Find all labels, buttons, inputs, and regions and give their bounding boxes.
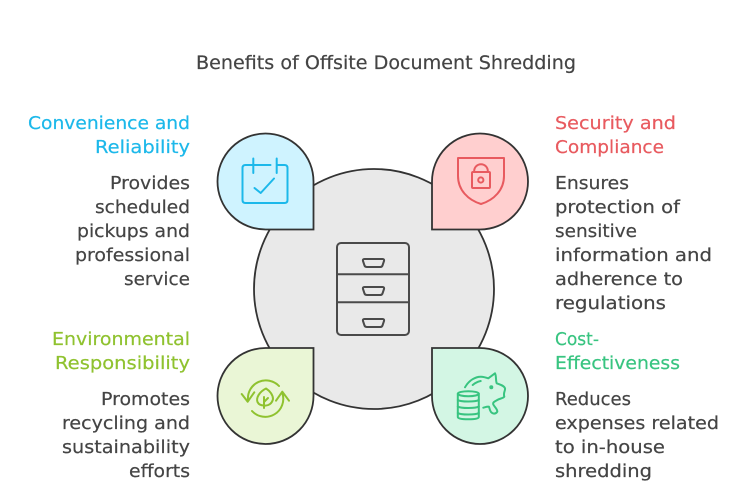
heading: convenience and reliability: Reliability	[95, 137, 190, 158]
heading: environmental responsibility	[52, 329, 190, 374]
text: security description: Ensures	[555, 173, 629, 194]
text: security description	[555, 173, 712, 314]
heading: environmental responsibility: Environmental	[52, 329, 190, 350]
title: Benefits of Offsite Document Shredding	[196, 52, 576, 74]
heading: security and compliance: Security and	[555, 113, 676, 134]
icon: filing cabinet	[337, 243, 409, 335]
text: environmental description: sustainability	[62, 437, 190, 458]
heading: cost-effectiveness: Cost-	[555, 329, 599, 350]
text: convenience description: pickups and	[77, 221, 190, 242]
text: security description: sensitive	[555, 221, 637, 242]
heading: cost-effectiveness	[555, 329, 680, 374]
text: cost description: shredding	[555, 461, 652, 482]
icon: recycling leaf	[242, 380, 289, 417]
text: convenience description: Provides	[110, 173, 190, 194]
heading: security and compliance: Compliance	[555, 137, 664, 158]
text: security description: protection of	[555, 197, 681, 218]
text: cost description	[555, 389, 719, 482]
text: security description: adherence to	[555, 269, 683, 290]
text: environmental description: recycling and	[62, 413, 190, 434]
icon: calendar check	[242, 158, 288, 203]
heading: security and compliance	[555, 113, 676, 158]
text: cost description: Reduces	[555, 389, 631, 410]
panel: convenience teardrop	[218, 134, 314, 230]
heading: environmental responsibility: Responsibility	[55, 353, 190, 374]
text: cost description: to in-house	[555, 437, 665, 458]
icon: shield with padlock	[458, 158, 504, 204]
text: environmental description: efforts	[129, 461, 190, 482]
heading: cost-effectiveness: Effectiveness	[555, 353, 680, 374]
heading: convenience and reliability: Convenience and	[28, 113, 190, 134]
text: environmental description	[62, 389, 190, 482]
text: security description: information and	[555, 245, 712, 266]
heading: convenience and reliability	[28, 113, 190, 158]
text: security description: regulations	[555, 293, 666, 314]
panel: environmental teardrop	[218, 348, 314, 444]
text: convenience description: professional	[75, 245, 190, 266]
text: convenience description: scheduled	[95, 197, 190, 218]
central circle	[254, 169, 494, 409]
icon: piggy bank and coins	[458, 373, 505, 419]
panel: security teardrop	[432, 134, 528, 230]
text: cost description: expenses related	[555, 413, 719, 434]
panel: cost teardrop	[432, 348, 528, 444]
text: environmental description: Promotes	[101, 389, 190, 410]
text: convenience description: service	[124, 269, 190, 290]
text: convenience description	[75, 173, 190, 290]
